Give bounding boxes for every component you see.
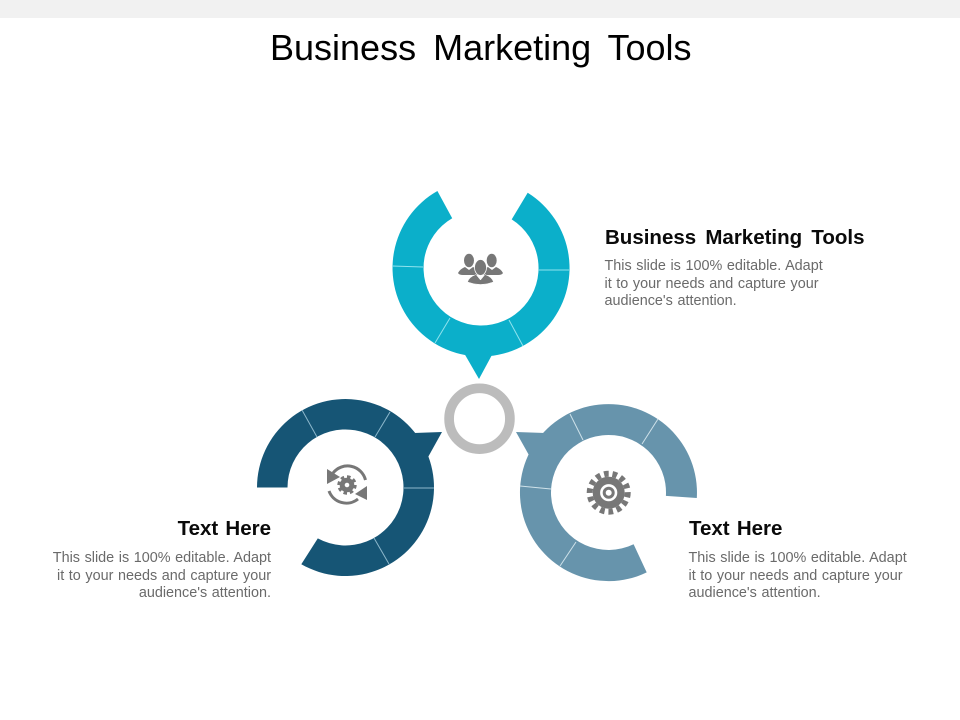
text block: top right: it to your needs and capture your — [604, 276, 819, 292]
text block: top right — [604, 226, 865, 309]
text block: bottom left: it to your needs and capture your — [57, 568, 271, 584]
text block: top right: This slide is 100% editable. Adapt — [604, 258, 823, 274]
text block: bottom right — [688, 517, 907, 601]
text block: bottom right: Text Here — [689, 517, 782, 540]
text block: bottom left — [53, 517, 271, 601]
title: Business Marketing Tools — [270, 27, 692, 68]
text block: bottom left: This slide is 100% editable. Adapt — [53, 550, 271, 566]
icon: group of people — [458, 254, 503, 284]
text block: bottom left: Text Here — [178, 517, 271, 540]
panel: left dark blue ring — [257, 399, 442, 576]
text block: bottom left: audience's attention. — [139, 585, 271, 601]
text block: bottom right: audience's attention. — [688, 585, 821, 601]
icon: refresh with gear — [327, 466, 367, 503]
icon: gear — [590, 474, 628, 512]
text block: top right: Business Marketing Tools — [605, 226, 865, 249]
panel: top teal ring — [392, 191, 570, 379]
text block: bottom right: This slide is 100% editable. Adapt — [688, 550, 907, 566]
text block: bottom right: it to your needs and capture your — [688, 568, 903, 584]
text block: top right: audience's attention. — [604, 293, 737, 309]
panel: right steel blue ring — [516, 404, 697, 581]
center grey ring — [449, 388, 510, 449]
